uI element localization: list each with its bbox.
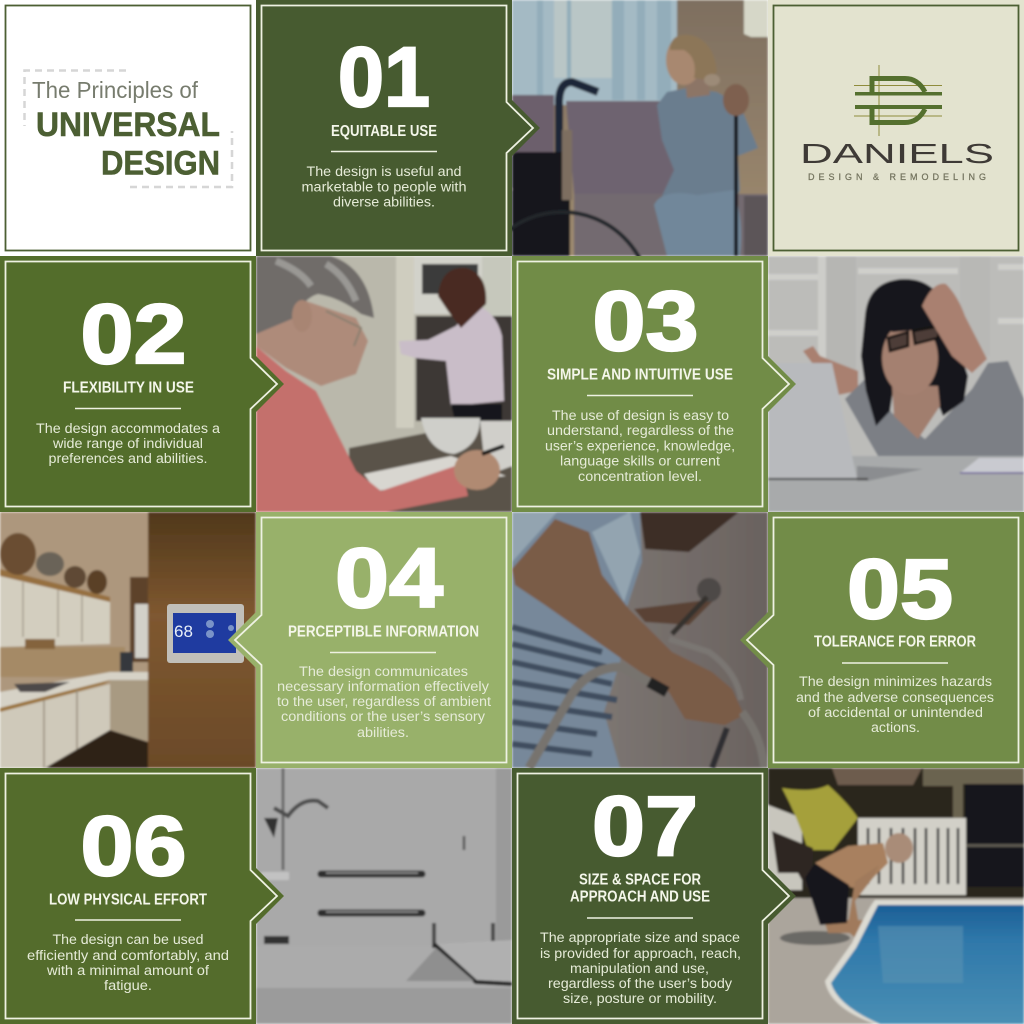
body text: The design minimizes hazards [799,674,992,689]
icon: daniels d monogram [854,65,942,136]
body text: abilities. [357,725,409,740]
panel: 05 tolerance for error [740,512,1024,768]
number 04: 04 [335,531,443,625]
body text: The design is useful and [306,164,462,179]
body text: size, posture or mobility. [563,991,717,1006]
panel: 07 size and space for approach and use [512,768,796,1024]
heading [570,872,710,906]
photo: elderly woman writing in kitchen [256,256,512,512]
body text: diverse abilities. [333,194,435,210]
body text: marketable to people with [302,180,466,194]
body text: manipulation and use, [570,961,709,976]
panel: title [0,0,256,256]
panel: 06 low physical effort [0,768,284,1024]
body text [540,930,741,1006]
logo tagline: DESIGN & REMODELING [808,172,986,182]
body text: language skills or current [560,454,720,468]
photo: woman with cane and wheelchair [512,0,768,256]
body text: wide range of individual [52,436,203,451]
icon: thermostat [167,604,244,663]
body text: is provided for approach, reach, [540,946,741,961]
body text [277,664,491,740]
body text: concentration level. [578,469,702,484]
body text: preferences and abilities. [48,451,207,466]
heading: APPROACH AND USE [570,888,710,906]
body text: understand, regardless of the [547,423,734,438]
body text: The design accommodates a [36,421,221,436]
number 02: 02 [80,287,186,381]
panel: 03 simple and intuitive use [512,256,796,512]
logo wordmark: DANIELS [800,138,994,169]
heading: design: DESIGN [101,144,220,182]
heading: TOLERANCE FOR ERROR [814,634,976,650]
panel: 04 perceptible information [228,512,512,768]
heading: PERCEPTIBLE INFORMATION [288,624,479,640]
body text: of accidental or unintended [808,705,983,720]
heading: SIMPLE AND INTUITIVE USE [547,366,733,384]
body text: The design communicates [299,664,468,679]
number 07: 07 [592,779,698,873]
photo: frustrated woman at laptop [768,256,1024,512]
body text: actions. [871,720,920,735]
icon: thermostat: 68 [174,622,193,641]
body text: and the adverse consequences [796,690,994,705]
heading: SIZE & SPACE FOR [579,872,701,888]
photo: man at edge of pool [768,768,1024,1024]
heading: EQUITABLE USE [331,123,437,140]
heading: LOW PHYSICAL EFFORT [49,892,207,908]
body text: The use of design is easy to [552,408,729,423]
body text: to the user, regardless of ambient [277,694,491,709]
body text: user’s experience, knowledge, [545,438,735,454]
panel: 02 flexibility in use [0,256,284,512]
body text: regardless of the user’s body [548,976,732,991]
body text: The design can be used [52,932,204,947]
body text [302,164,466,210]
body text [796,674,994,735]
number 03: 03 [592,274,698,368]
panel: 01 equitable use [256,0,540,256]
heading: FLEXIBILITY IN USE [63,380,194,396]
heading: universal: UNIVERSAL [36,106,220,144]
body text: with a minimal amount of [46,963,209,978]
panel: logo [768,0,1024,256]
heading: the principles of: The Principles of [32,77,199,103]
body text [36,421,221,466]
photo: bathtub with grab bars [256,768,512,1024]
body text [545,408,735,484]
body text [27,932,229,993]
body text: necessary information effectively [277,679,489,694]
photo: kitchen with wall thermostat [0,512,256,768]
body text: The appropriate size and space [540,930,740,945]
body text: efficiently and comfortably, and [27,948,229,963]
photo: person with walker and grab bar [512,512,768,768]
number 01: 01 [338,30,430,124]
number 05: 05 [847,542,953,636]
body text: conditions or the user’s sensory [281,709,485,724]
body text: fatigue. [104,978,152,993]
number 06: 06 [80,799,186,893]
